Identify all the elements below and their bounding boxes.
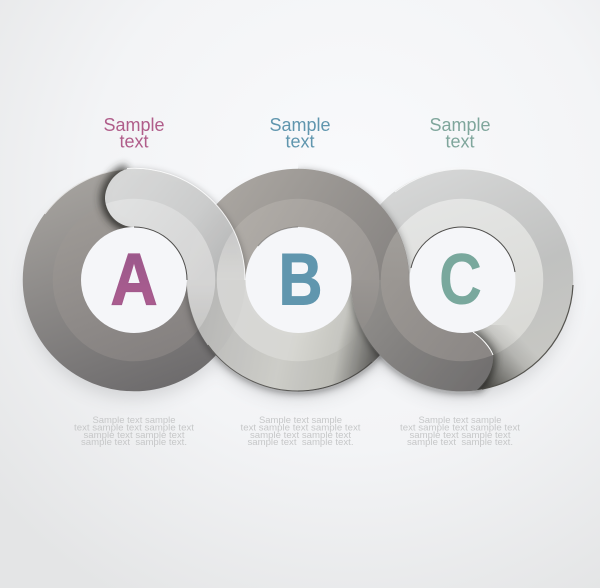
body text A: text sample text sample text [74, 422, 194, 434]
body text B [240, 415, 361, 448]
blob contact shadow [105, 169, 134, 227]
ribbon lower part around C [351, 280, 496, 398]
letter C: C [439, 240, 482, 320]
overlap lens upper [216, 231, 244, 280]
ribbon upper right part over B [298, 166, 410, 280]
curl shade on ring C [470, 325, 534, 390]
body text A: sample text sample text. [81, 437, 187, 448]
body text C: text sample text sample text [400, 422, 520, 434]
ground shadows [27, 184, 569, 398]
heading B [269, 115, 331, 152]
body text B: sample text sample text. [248, 437, 354, 448]
heading C [429, 115, 491, 152]
ring A highlight [45, 169, 125, 214]
circle A dark ring [38, 169, 230, 376]
heading C: Sample [429, 115, 491, 135]
overlap lens upper right [380, 231, 409, 280]
ribbon upper part over A [102, 166, 237, 280]
ribbon edge highlights [127, 168, 573, 391]
body text C: sample text sample text [410, 430, 511, 441]
light ribbon from A into B [38, 184, 394, 376]
heading B: text [285, 132, 315, 152]
circle C light ring [366, 169, 558, 376]
heading A: text [119, 132, 149, 152]
ribbon B top left part [216, 168, 298, 277]
curl highlight [473, 332, 493, 355]
heading C: text [445, 132, 475, 152]
body text B: text sample text sample text [240, 422, 361, 434]
centre discs [81, 227, 516, 333]
body text B: Sample text sample [259, 415, 342, 426]
heading A: Sample [103, 115, 165, 135]
overlap lens lower [187, 280, 216, 329]
body text B: sample text sample text [250, 430, 351, 441]
body text A [74, 415, 194, 448]
overlap lens lower right [369, 280, 379, 296]
heading A [103, 115, 165, 152]
body text A: sample text sample text [84, 430, 185, 441]
inner disc edge lines [134, 227, 515, 280]
body text C: Sample text sample [418, 415, 502, 426]
body text A: Sample text sample [92, 415, 176, 426]
body text C [400, 415, 520, 448]
heading B: Sample [269, 115, 331, 135]
ring C edge lines [395, 169, 530, 192]
letter B: B [278, 240, 322, 320]
dark ribbon from B into C [298, 166, 496, 398]
curl contact shadow [473, 332, 493, 390]
letter A: A [110, 240, 158, 320]
body text C: sample text sample text. [407, 437, 513, 448]
ribbon lower part around B [186, 280, 384, 398]
